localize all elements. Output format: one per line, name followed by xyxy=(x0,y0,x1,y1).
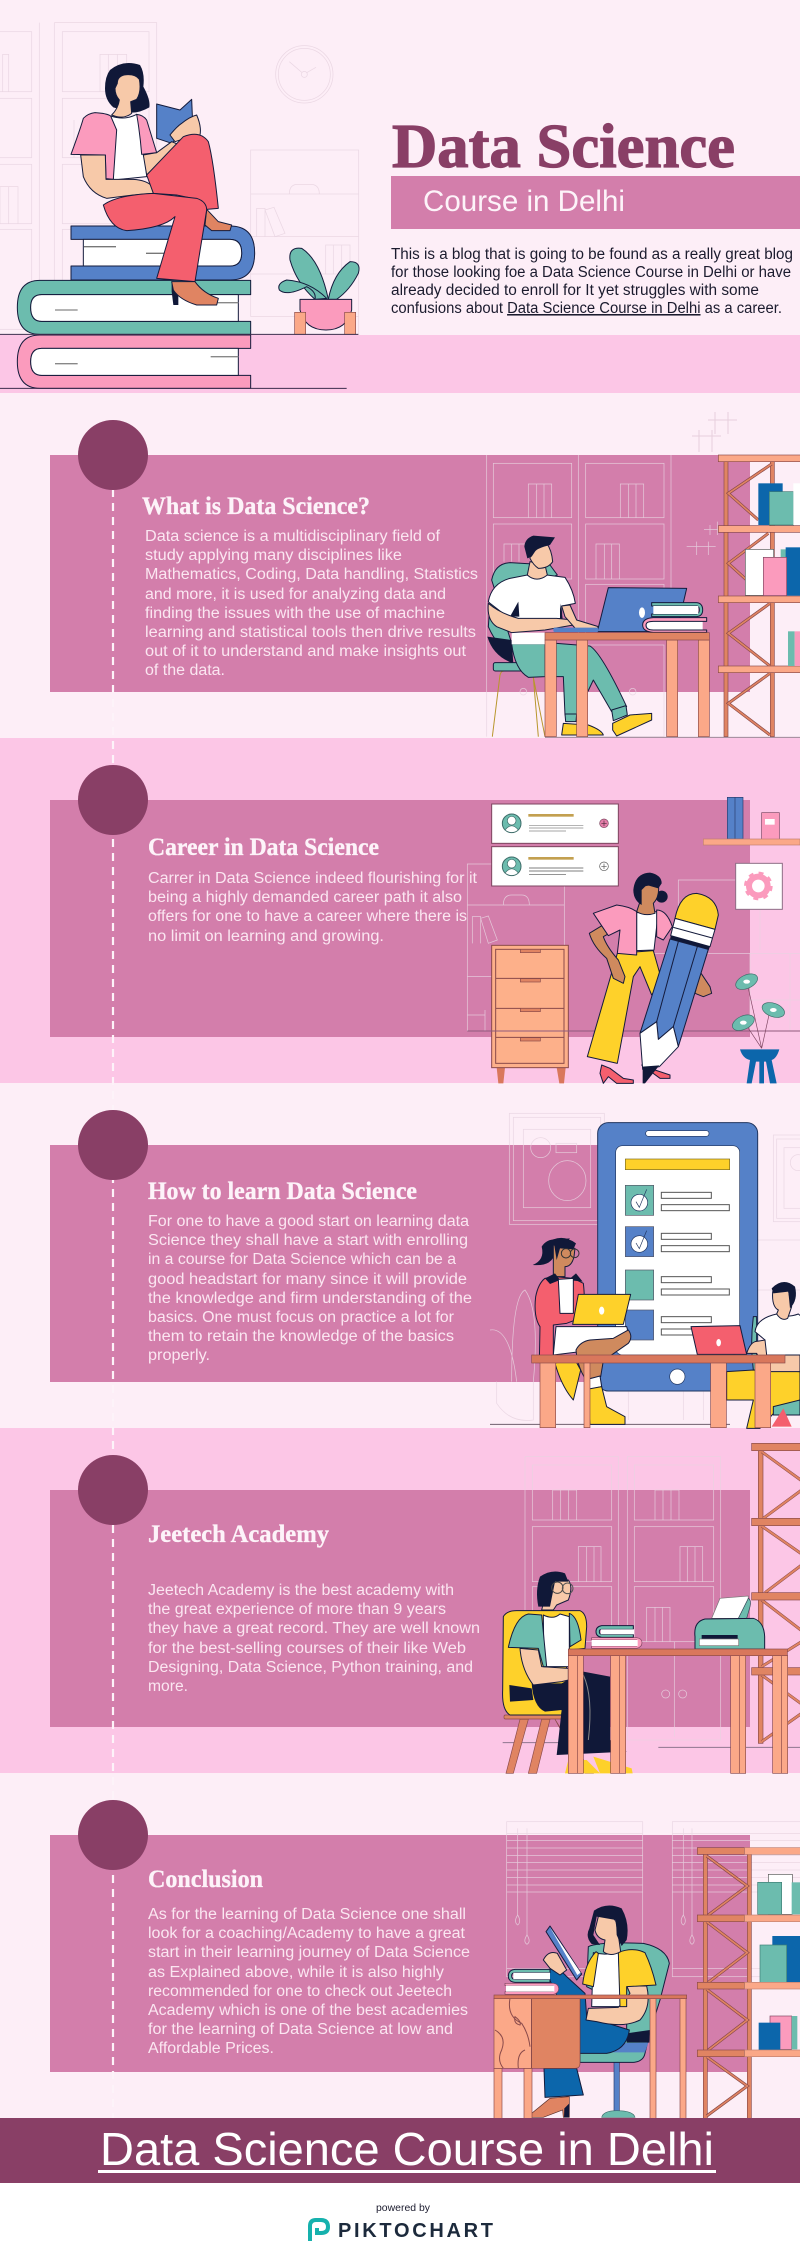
shelf xyxy=(718,455,800,738)
phone checklist xyxy=(598,1123,758,1391)
section 3 body text: For one to have a good start on learning data xyxy=(148,1213,469,1230)
laptop and books xyxy=(553,588,707,632)
title: Data Science xyxy=(392,113,735,181)
section 5 heading: Conclusion xyxy=(148,1866,263,1893)
section 4 body text: they have a great record. They are well known xyxy=(148,1620,480,1637)
section 1 body text: out of it to understand and make insights out xyxy=(145,643,467,660)
woman figure xyxy=(71,63,232,305)
section 5 body text: As for the learning of Data Science one shall xyxy=(148,1906,466,1923)
icon: gear xyxy=(736,863,782,909)
woman in teal chair xyxy=(530,1905,669,2117)
intro paragraph: This is a blog that is going to be found as a really great blog xyxy=(391,246,793,263)
panel: conclusion xyxy=(50,1835,750,2072)
section 3 heading: How to learn Data Science xyxy=(148,1178,417,1205)
section 4 body text: more. xyxy=(148,1678,188,1695)
section 5 body text: recommended for one to check out Jeetech xyxy=(148,1983,452,2000)
panel: jeetech academy xyxy=(50,1490,750,1727)
footer banner xyxy=(0,2118,800,2183)
section 2 body text: no limit on learning and growing. xyxy=(148,928,384,945)
panel: how to learn xyxy=(50,1145,650,1382)
section 3 body text: the knowledge and firm understanding of the xyxy=(148,1290,472,1307)
section 3 body text: good headstart for many since it will provide xyxy=(148,1271,467,1288)
timeline node 1 xyxy=(78,420,148,490)
section 5 body text: start in their learning journey of Data Science xyxy=(148,1944,470,1961)
section 1 heading: What is Data Science? xyxy=(142,493,370,520)
section 1 body text: Mathematics, Coding, Data handling, Statistics xyxy=(145,566,478,583)
section 2 body text: Carrer in Data Science indeed flourishing for it xyxy=(148,870,478,887)
printer xyxy=(695,1596,765,1649)
section 3 body text xyxy=(148,1213,472,1364)
section 1 body text: finding the issues with the use of machine xyxy=(145,605,445,622)
powered by label: powered by xyxy=(376,2202,431,2214)
section 2 body text: offers for one to have a career where there is xyxy=(148,908,467,925)
illustration: phone checklist with two students xyxy=(490,1113,800,1428)
dashed timeline xyxy=(112,489,114,2118)
timeline node 3 xyxy=(78,1110,148,1180)
section 4 body text xyxy=(148,1582,480,1695)
blue book xyxy=(71,226,255,280)
intro paragraph xyxy=(391,246,793,317)
filing cabinet xyxy=(492,945,568,1083)
section 4 body text: the great experience of more than 9 years xyxy=(148,1601,446,1618)
illustration: woman at wooden desk with book xyxy=(494,1822,800,2118)
subtitle bar: Course in Delhi xyxy=(423,185,625,218)
wooden desk xyxy=(494,1995,687,2118)
section 2 body text: being a highly demanded career path it also xyxy=(148,889,462,906)
potted plant xyxy=(279,248,359,334)
section 3 body text: them to retain the knowledge of the basics xyxy=(148,1328,454,1345)
woman with yellow laptop xyxy=(533,1238,631,1424)
section 4 body text: for the best-selling courses of their like Web xyxy=(148,1640,466,1657)
wall shelf xyxy=(703,797,800,845)
section 1 body text: of the data. xyxy=(145,662,225,679)
section 3 body text: basics. One must focus on practice a lot for xyxy=(148,1309,454,1326)
desk xyxy=(532,1355,785,1428)
section 3 body text: in a course for Data Science which can be a xyxy=(148,1251,456,1268)
plant on stool xyxy=(730,971,787,1083)
illustration: woman with giant pencil and profile cards xyxy=(467,797,800,1083)
section 2 heading: Career in Data Science xyxy=(148,834,379,861)
section 1 body text: and more, it is used for analyzing data and xyxy=(145,586,446,603)
logo: Piktochart: PIKTOCHART xyxy=(338,2220,493,2242)
section 1 body text xyxy=(145,528,478,679)
intro paragraph: confusions about Data Science Course in Delhi as a career. xyxy=(391,300,782,317)
section 4 heading: Jeetech Academy xyxy=(148,1521,329,1548)
footer banner: Data Science Course in Delhi xyxy=(100,2123,714,2175)
section 1 body text: study applying many disciplines like xyxy=(145,547,402,564)
desk xyxy=(568,1649,788,1773)
timeline node 5 xyxy=(78,1800,148,1870)
section 5 body text: as Explained above, while it is also highly xyxy=(148,1964,444,1981)
books on desk xyxy=(592,1626,642,1648)
section 2 body text xyxy=(148,870,478,945)
books on desk xyxy=(505,1969,559,1994)
panel: career in data science xyxy=(50,800,750,1037)
section 1 body text: Data science is a multidisciplinary field of xyxy=(145,528,441,545)
woman with pencil xyxy=(587,873,712,1083)
profile cards xyxy=(492,804,618,886)
section 5 body text: Academy which is one of the best academies xyxy=(148,2002,468,2019)
section 1 body text: learning and statistical tools then drive results xyxy=(145,624,476,641)
intro paragraph: already decided to enroll for It yet struggles with some xyxy=(391,282,759,299)
desk xyxy=(545,633,709,737)
illustration: man working on laptop with shelf xyxy=(487,455,800,738)
section 3 body text: properly. xyxy=(148,1347,210,1364)
section 5 body text xyxy=(148,1906,470,2057)
illustration: woman at desk with printer xyxy=(503,1443,800,1773)
floor line xyxy=(490,1423,730,1426)
timeline node 4 xyxy=(78,1455,148,1525)
section 4 body text: Designing, Data Science, Python training, and xyxy=(148,1659,473,1676)
section 5 body text: look for a coaching/Academy to have a great xyxy=(148,1925,466,1942)
section 3 body text: Science they shall have a start with enrolling xyxy=(148,1232,468,1249)
section 5 body text: Affordable Prices. xyxy=(148,2040,274,2057)
intro paragraph: for those looking foe a Data Science Course in Delhi or have xyxy=(391,264,791,281)
section 4 body text: Jeetech Academy is the best academy with xyxy=(148,1582,454,1599)
man at desk xyxy=(487,536,652,737)
teal book xyxy=(17,280,251,334)
shelf xyxy=(752,1443,800,1743)
panel: what is data science xyxy=(50,455,750,692)
student on right xyxy=(691,1282,800,1428)
section 5 body text: for the learning of Data Science at low and xyxy=(148,2021,453,2038)
decorative crosshair marks xyxy=(692,412,737,452)
shelf xyxy=(697,1848,800,2118)
woman in yellow chair xyxy=(503,1571,633,1773)
timeline node 2 xyxy=(78,765,148,835)
pink book xyxy=(17,335,251,388)
subtitle bar xyxy=(391,176,800,229)
illustration: woman reading on stacked books xyxy=(0,23,359,388)
giant pencil xyxy=(640,893,718,1083)
